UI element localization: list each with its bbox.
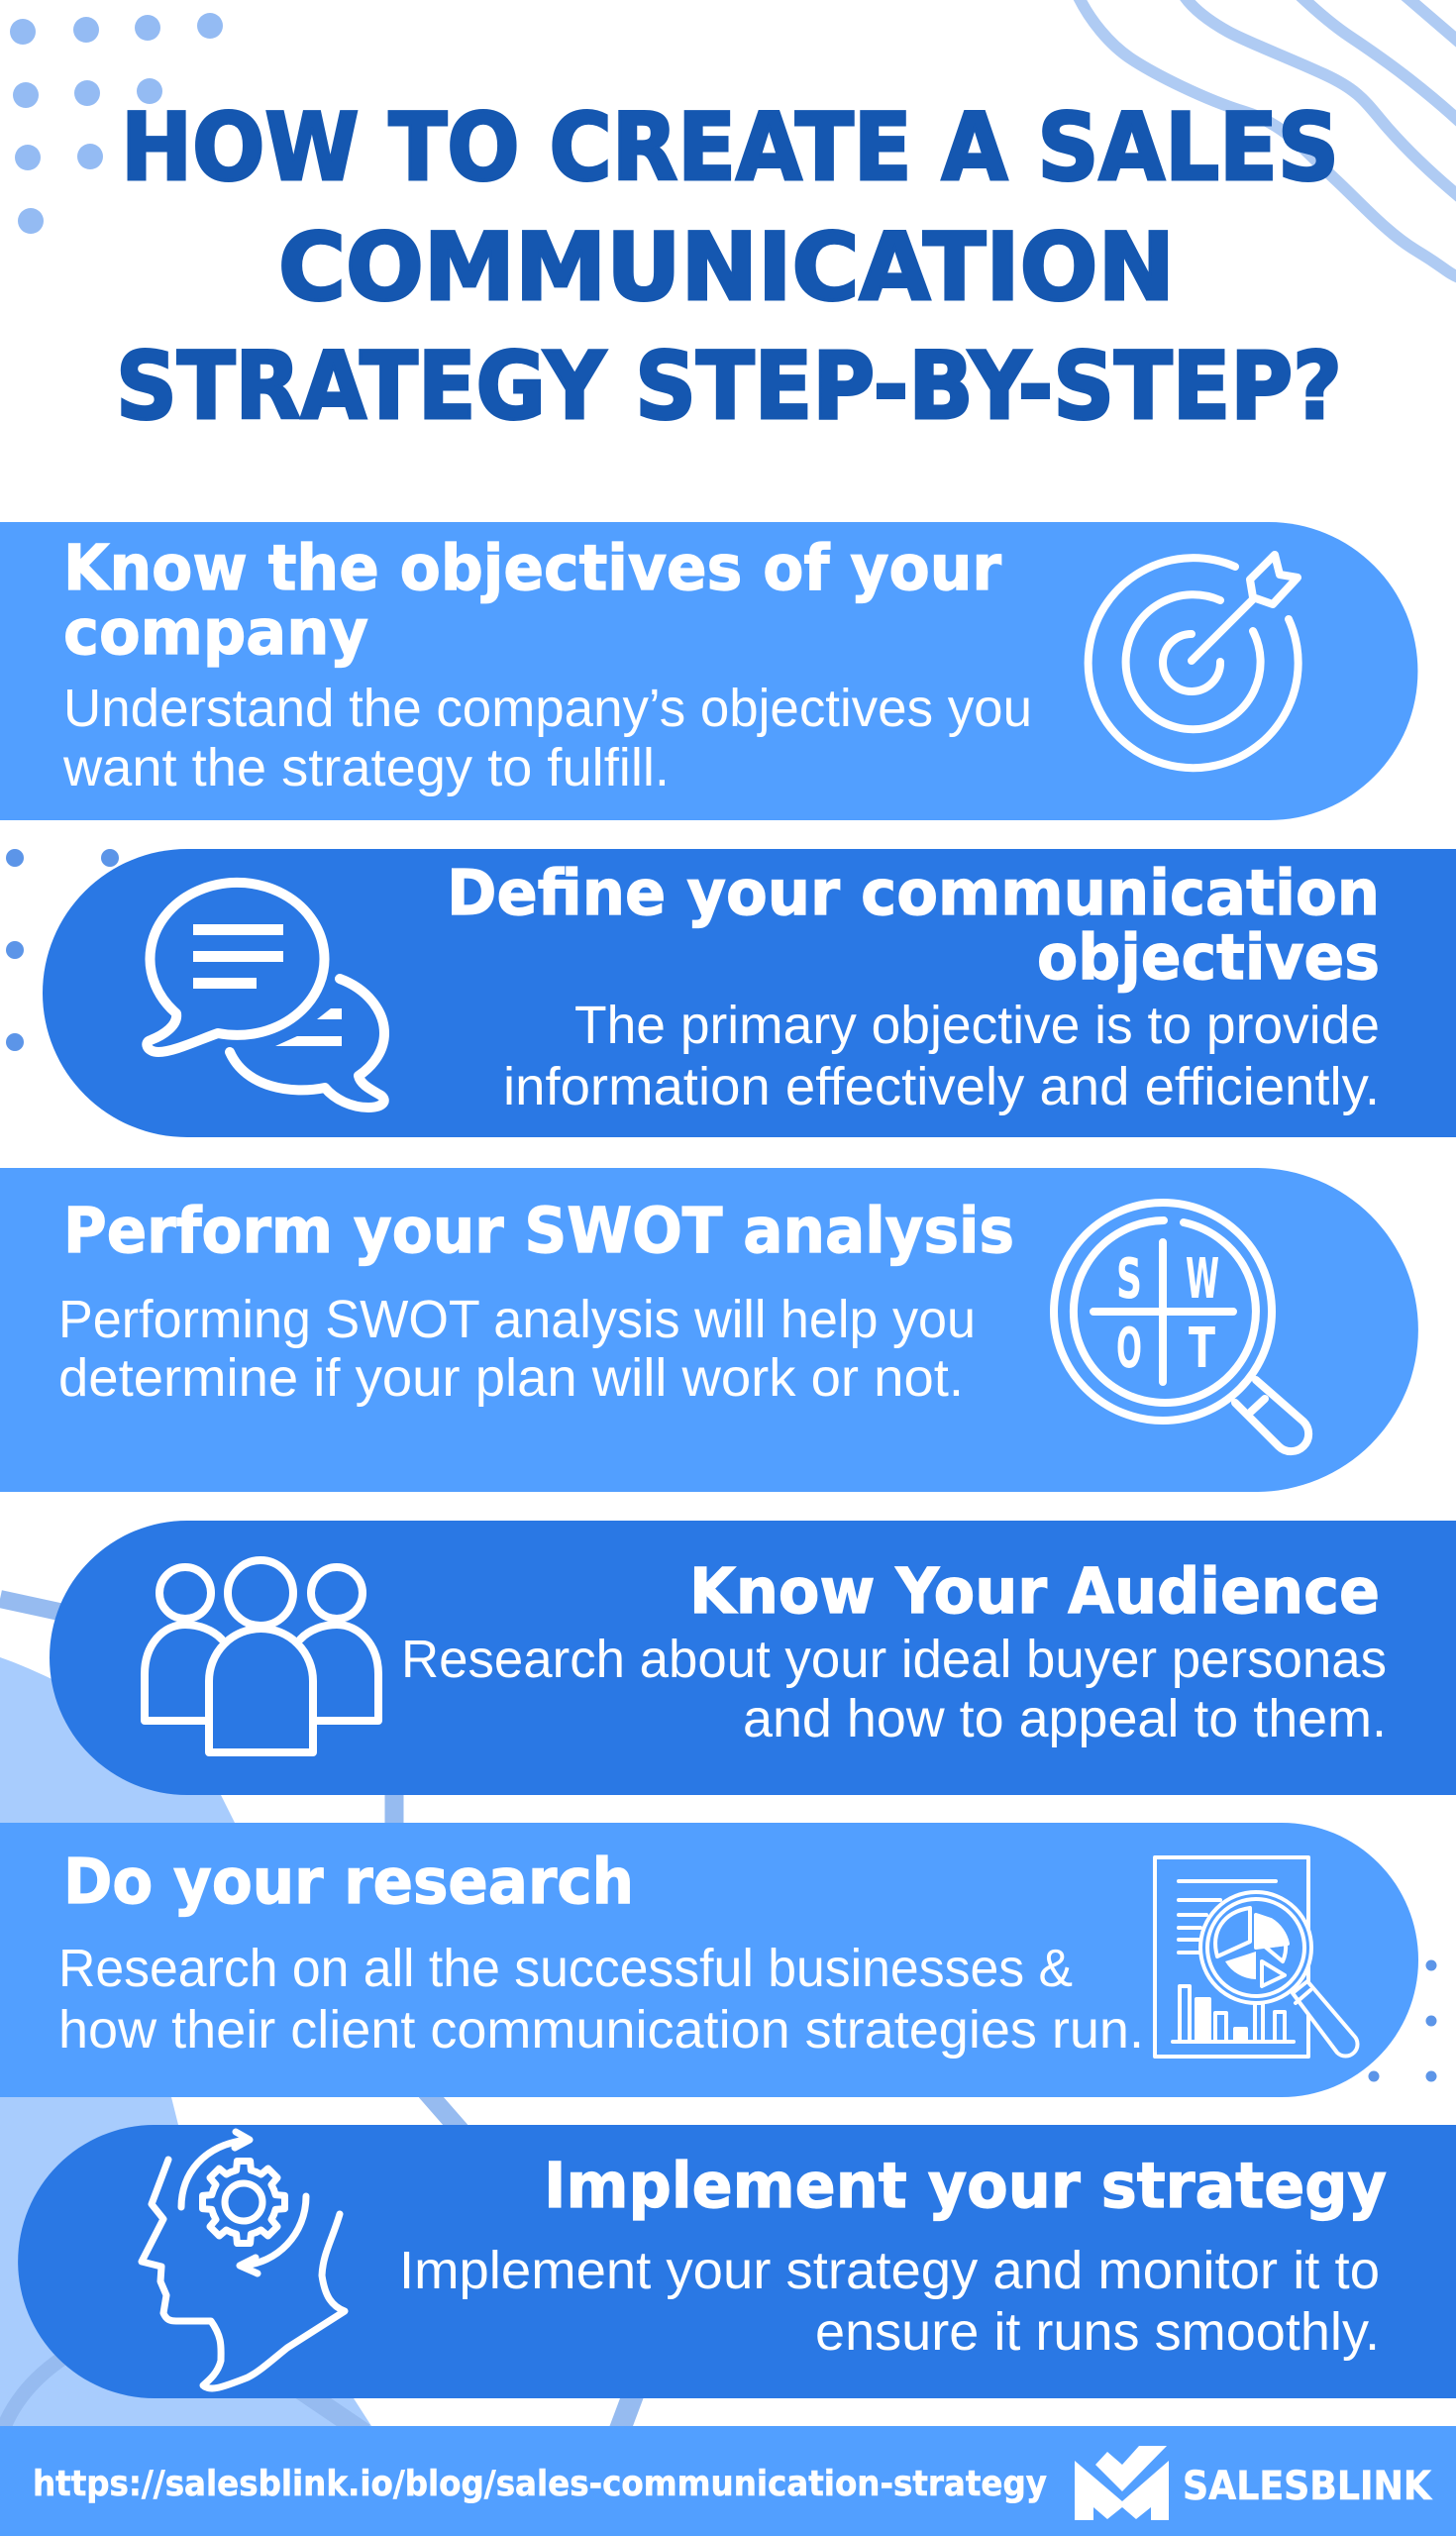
panel: know the objectives xyxy=(0,522,1417,820)
heading: know the objectives: company xyxy=(63,596,368,669)
heading: audience: Know Your Audience xyxy=(689,1555,1380,1628)
heading: implement: Implement your strategy xyxy=(544,2150,1387,2222)
icon: SWOT magnifier: W xyxy=(1186,1247,1219,1312)
heading: know the objectives: Know the objectives of your xyxy=(63,532,1001,604)
body: implement xyxy=(399,2241,1380,2362)
body: define objectives: information effectively and efficiently. xyxy=(503,1057,1380,1116)
body: research xyxy=(58,1939,1144,2060)
title: STRATEGY STEP-BY-STEP? xyxy=(116,333,1342,441)
logo mark xyxy=(1075,2446,1169,2520)
heading: define objectives: Define your communication xyxy=(447,857,1380,929)
panel: do your research xyxy=(0,1823,1418,2097)
body: know the objectives xyxy=(62,679,1032,797)
icon: report with magnifier xyxy=(1155,1857,1358,2057)
icon: SWOT magnifier: S xyxy=(1116,1247,1142,1312)
icon: three people xyxy=(145,1560,378,1752)
body: research: how their client communication strategies run. xyxy=(58,2000,1144,2060)
icon: SWOT magnifier: O xyxy=(1116,1317,1142,1381)
heading: research: Do your research xyxy=(63,1846,634,1918)
footer url: https://salesblink.io/blog/sales-communication-strategy xyxy=(33,2464,1047,2504)
dots beside panel 5 xyxy=(1369,1959,1436,2082)
body: SWOT xyxy=(58,1290,976,1408)
body: SWOT: Performing SWOT analysis will help you xyxy=(58,1290,976,1349)
footer bar xyxy=(0,2426,1456,2536)
body: audience: Research about your ideal buyer personas xyxy=(401,1630,1387,1689)
dots beside panel 2 xyxy=(6,849,119,1051)
background: dots top left xyxy=(10,13,223,234)
logo wordmark: SALESBLINK xyxy=(1183,2464,1433,2509)
icon: SWOT magnifier xyxy=(1054,1203,1308,1451)
panel: implement your strategy xyxy=(18,2125,1456,2398)
body: audience: and how to appeal to them. xyxy=(743,1689,1387,1748)
body: know the objectives: Understand the company’s objectives you xyxy=(63,679,1032,738)
title: HOW TO CREATE A SALES xyxy=(121,94,1339,202)
heading: know the objectives xyxy=(63,532,1001,669)
body: SWOT: determine if your plan will work or not. xyxy=(58,1348,964,1408)
icon: chat bubbles xyxy=(147,883,384,1108)
title xyxy=(116,94,1342,441)
icon: SWOT magnifier: T xyxy=(1189,1317,1215,1381)
icon: head with gear xyxy=(142,2132,345,2388)
body: define objectives: The primary objective is to provide xyxy=(574,996,1380,1055)
heading: define objectives: objectives xyxy=(1037,921,1380,994)
heading: SWOT: Perform your SWOT analysis xyxy=(63,1195,1014,1267)
body: audience xyxy=(401,1630,1387,1748)
body: implement: Implement your strategy and monitor it to xyxy=(399,2241,1380,2300)
icon: target with arrow xyxy=(1089,555,1299,768)
body: implement: ensure it runs smoothly. xyxy=(815,2302,1380,2362)
title: COMMUNICATION xyxy=(278,214,1175,322)
panel: know your audience xyxy=(50,1521,1456,1795)
heading: define objectives xyxy=(447,857,1380,994)
panel: SWOT analysis xyxy=(0,1168,1418,1492)
background: waves top right xyxy=(1078,0,1456,278)
body: know the objectives: want the strategy to fulfill. xyxy=(62,738,670,797)
body: define objectives xyxy=(503,996,1380,1116)
background: lower left blob xyxy=(0,1599,634,2433)
body: research: Research on all the successful businesses & xyxy=(58,1939,1073,1998)
panel: define communication objectives xyxy=(43,849,1456,1137)
